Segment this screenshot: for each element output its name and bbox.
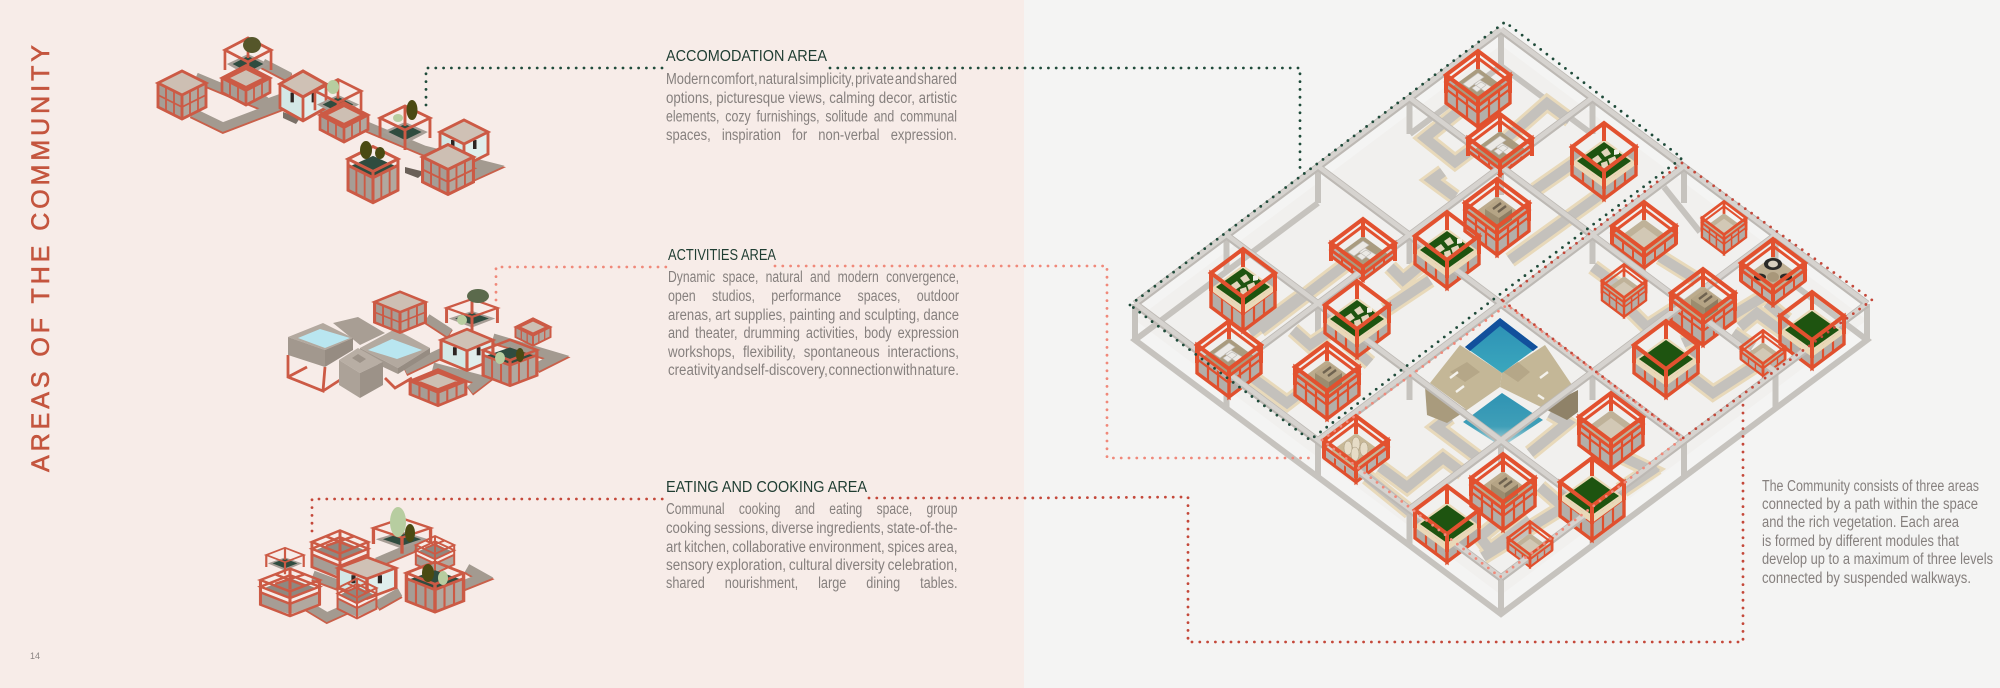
background: right page: [1024, 0, 2000, 688]
description: activities area: creativity and self-discovery, connection with nature.: [668, 362, 959, 379]
description: eating and cooking area: shared nourishment, large dining tables.: [666, 575, 958, 592]
pool and central platform: [1425, 318, 1578, 447]
description: accommodation area: [666, 71, 957, 144]
description: eating and cooking area: Communal cooking and eating space, group: [666, 501, 958, 518]
description: eating and cooking area: [666, 501, 958, 592]
block: community description: and the rich vegetation. Each area: [1762, 514, 1959, 531]
illustration: accommodation area model: [158, 37, 491, 203]
dotted connector: eating and cooking area: [312, 163, 1872, 642]
description: activities area: arenas, art supplies, painting and sculpting, dance: [668, 307, 959, 324]
heading: accommodation area: ACCOMODATION AREA: [666, 48, 828, 65]
vertical title: AREAS OF THE COMMUNITY: [27, 45, 55, 472]
illustration: eating and cooking area model: [260, 507, 483, 618]
description: eating and cooking area: sensory exploration, cultural diversity celebration,: [666, 557, 958, 574]
description: accommodation area: options, picturesque views, calming decor, artistic: [666, 90, 957, 107]
description: activities area: Dynamic space, natural and modern convergence,: [668, 269, 959, 286]
description: eating and cooking area: art kitchen, collaborative environment, spices area,: [666, 539, 958, 556]
block: community description: [1762, 478, 1993, 587]
heading: eating and cooking area: EATING AND COOKING AREA: [666, 479, 868, 496]
walkways: [1250, 103, 1803, 557]
description: activities area: [667, 269, 959, 379]
dotted connector: accommodation area: [426, 22, 1682, 440]
block: activities area text: [667, 247, 959, 379]
block: eating and cooking area text: [666, 479, 958, 592]
illustration: activities area model: [288, 289, 557, 406]
description: activities area: and theater, drumming activities, body expression: [668, 325, 959, 342]
block: community description: is formed by different modules that: [1762, 533, 1960, 550]
roof grid beams: [1135, 29, 1867, 578]
description: accommodation area: elements, cozy furnishings, solitude and communal: [666, 108, 957, 126]
description: accommodation area: Modern comfort, natural simplicity, private and shared: [666, 71, 957, 88]
description: accommodation area: spaces, inspiration for non-verbal expression.: [666, 127, 957, 144]
description: eating and cooking area: cooking sessions, diverse ingredients, state-of-the-: [666, 520, 958, 537]
lower frame and columns: [1135, 30, 1867, 614]
heading: activities area: ACTIVITIES AREA: [668, 247, 777, 264]
isometric community plan: [1135, 29, 1867, 614]
dotted connector: activities area: [496, 266, 1683, 577]
page number: 14: [30, 651, 40, 661]
description: activities area: workshops, flexibility, spontaneous interactions,: [667, 344, 959, 361]
module bodies: [1197, 75, 1844, 567]
plan floor: [1135, 45, 1867, 595]
block: accommodation area text: [666, 48, 957, 144]
description: activities area: open studios, performance spaces, outdoor: [668, 288, 959, 305]
background: left page: [0, 0, 1024, 688]
module tops and frames: [1197, 51, 1844, 564]
